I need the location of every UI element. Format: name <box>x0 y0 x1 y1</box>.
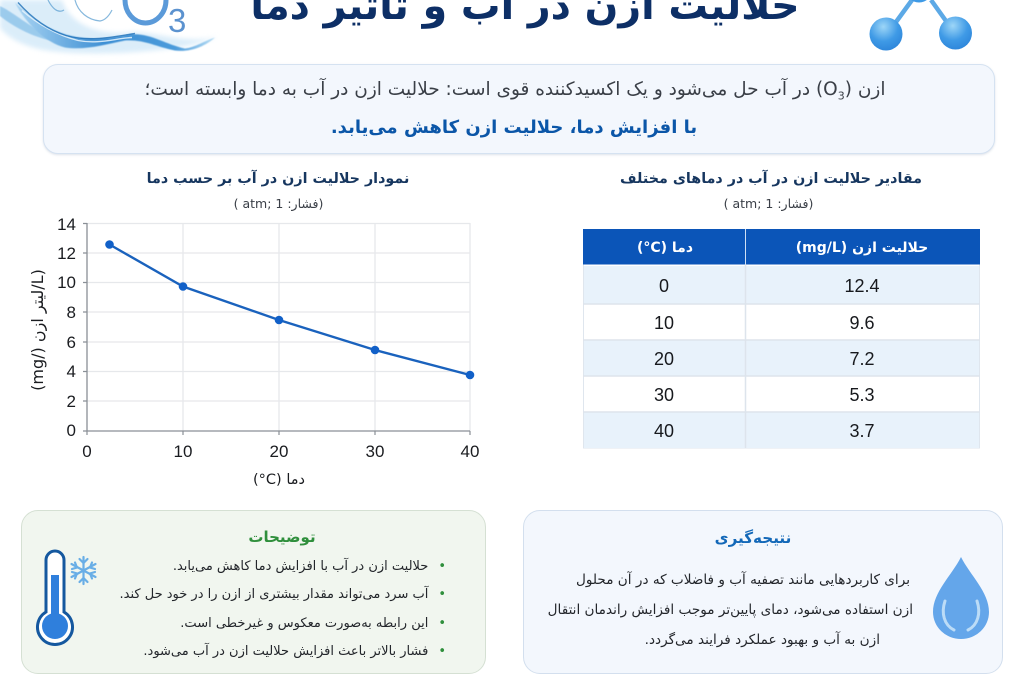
table values: 12.4 <box>844 276 880 296</box>
conclusion paragraph: ازن استفاده می‌شود، دمای پایین‌تر موجب افزایش راندمان انتقال <box>548 602 913 618</box>
table values: 9.6 <box>849 313 875 333</box>
y axis tick labels: 10 <box>57 273 76 292</box>
conclusion heading: نتیجه‌گیری <box>715 529 791 547</box>
table values: 40 <box>654 421 674 441</box>
data line <box>105 240 474 379</box>
icon: water splash with O3 <box>0 0 215 56</box>
table values <box>654 276 880 441</box>
table values: 0 <box>659 276 669 296</box>
y axis tick labels: 12 <box>57 244 76 263</box>
intro highlighted conclusion: با افزایش دما، حلالیت ازن کاهش می‌یابد. <box>331 116 697 138</box>
y axis tick labels <box>57 215 76 440</box>
y axis tick labels: 14 <box>57 215 76 234</box>
table values: 7.2 <box>849 349 875 369</box>
explanations list <box>120 558 446 659</box>
conclusion paragraph: ازن به آب و بهبود عملکرد فرایند می‌گردد. <box>645 632 880 648</box>
icon: ozone molecule <box>870 0 972 50</box>
panel: introduction <box>43 64 995 154</box>
explanations list: •حلالیت ازن در آب با افزایش دما کاهش می‌یابد. <box>173 559 446 574</box>
y axis tick labels: 6 <box>67 333 76 352</box>
x axis tick labels: 40 <box>461 442 479 461</box>
x axis tick labels: 20 <box>270 442 288 461</box>
table values: 3.7 <box>849 421 875 441</box>
table values: 20 <box>654 349 674 369</box>
intro sentence: ازن (O3) در آب حل می‌شود و یک اکسیدکننده قوی است: حلالیت ازن در آب به دما وابسته است؛ <box>144 79 886 103</box>
y axis tick labels: 2 <box>67 392 76 411</box>
explanations list: •فشار بالاتر باعث افزایش حلالیت ازن در آب می‌شود. <box>143 644 446 659</box>
table subheading: (فشار: 1 ;atm ) <box>724 196 813 211</box>
table header labels: حلالیت ازن (mg/L) <box>796 240 928 256</box>
conclusion paragraph <box>548 571 913 648</box>
explanations heading: توضیحات <box>248 528 316 546</box>
x axis tick labels <box>82 442 479 461</box>
chart heading: نمودار حلالیت ازن در آب بر حسب دما <box>147 170 409 186</box>
table values: 5.3 <box>849 385 875 405</box>
y axis tick labels: 0 <box>67 421 76 440</box>
table header labels <box>637 240 928 256</box>
icon: thermometer <box>36 550 74 646</box>
icon: snowflake <box>70 556 97 586</box>
panel: explanations <box>21 510 486 674</box>
table heading: مقادیر حلالیت ازن در آب در دماهای مختلف <box>620 170 922 186</box>
x axis tick labels: 10 <box>174 442 192 461</box>
explanations list: •این رابطه به‌صورت معکوس و غیرخطی است. <box>180 616 446 631</box>
y axis tick labels: 4 <box>67 362 76 381</box>
y axis tick labels: 8 <box>67 303 76 322</box>
x axis tick labels: 0 <box>82 442 92 461</box>
table header labels: دما ‎(°C)‎ <box>637 240 693 256</box>
chart subheading: (فشار: 1 ;atm ) <box>234 196 323 211</box>
x axis title: دما ‎(°C)‎ <box>253 472 305 488</box>
line chart <box>28 215 479 488</box>
y axis title: (mg/) ازن ‎لیتر/L) <box>28 269 48 391</box>
table values: 10 <box>654 313 674 333</box>
panel: conclusion <box>523 510 1003 674</box>
explanations list: •آب سرد می‌تواند مقدار بیشتری از ازن را در خود حل کند. <box>120 587 446 602</box>
O3 label <box>125 0 186 39</box>
conclusion paragraph: برای کاربردهایی مانند تصفیه آب و فاضلاب که در آن محلول <box>576 572 910 588</box>
x axis tick labels: 30 <box>366 442 384 461</box>
table values: 30 <box>654 385 674 405</box>
table: solubility values <box>583 229 980 448</box>
O3 label: 3 <box>168 2 186 39</box>
